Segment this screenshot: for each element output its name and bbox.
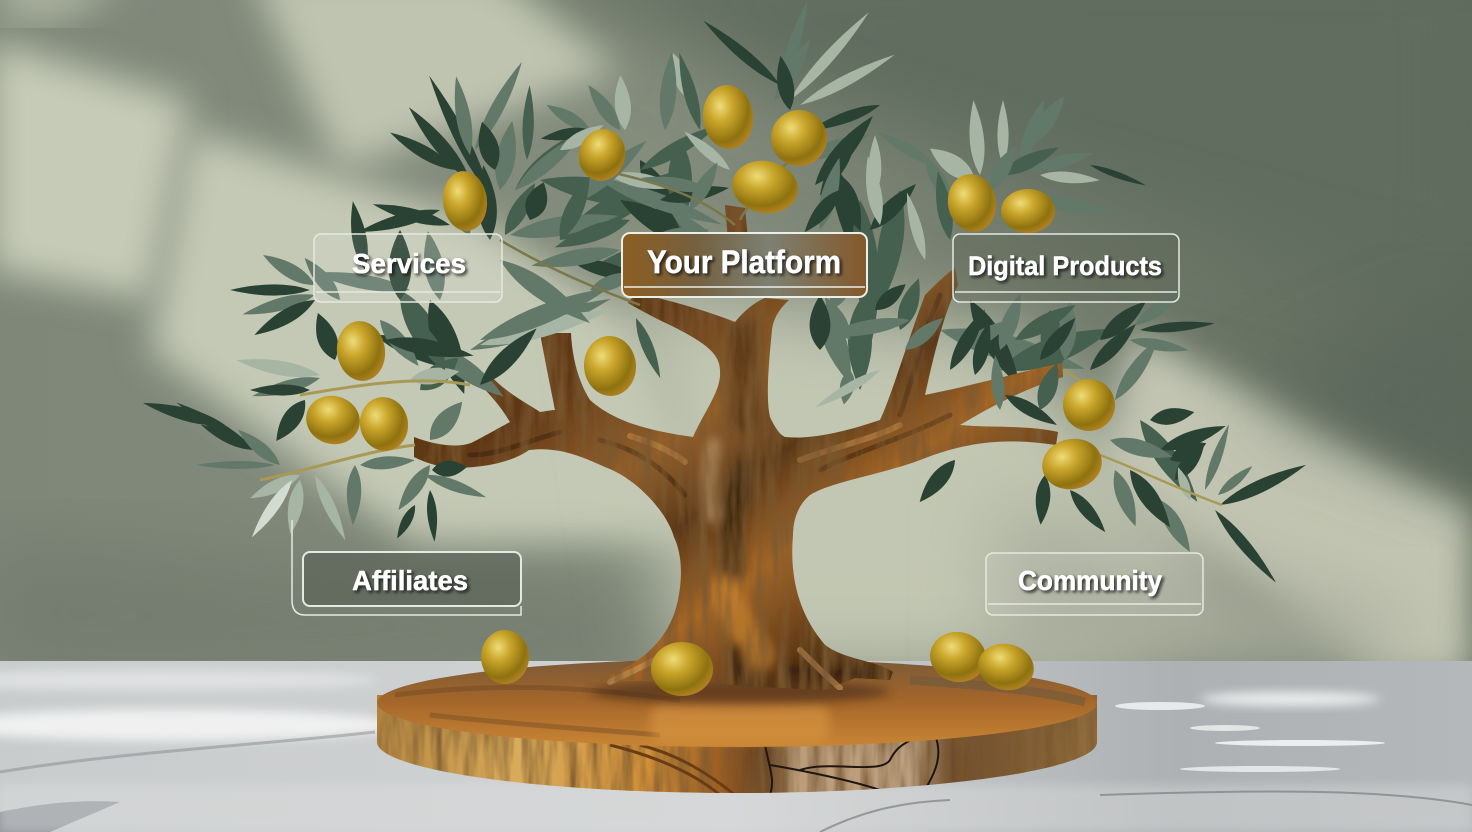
leaves: right middle cluster [810, 263, 1215, 507]
golden olives on the base [481, 628, 1038, 696]
leaves: top center cluster [476, 0, 938, 380]
wooden disc base [377, 659, 1097, 795]
leaves: upper left cluster [346, 59, 573, 271]
label: Digital Products [953, 234, 1179, 302]
label: Your Platform [622, 233, 867, 297]
label: Services [314, 234, 502, 302]
leaf stems [260, 381, 470, 480]
label: Your Platform: Your Platform [647, 244, 841, 280]
leaves: lower left cluster [141, 381, 488, 543]
tree trunk and branches [414, 205, 1063, 690]
olive leaves behind the branches [389, 140, 1206, 508]
label: Services: Services [352, 248, 466, 279]
label: Community [986, 553, 1203, 615]
label: Community: Community [1018, 565, 1162, 596]
leaves: upper right cluster [901, 91, 1147, 261]
olive leaves [141, 0, 1309, 586]
label: Affiliates [292, 520, 521, 615]
label: Affiliates: Affiliates [352, 565, 468, 596]
leaves: lower right cluster [1033, 334, 1309, 586]
golden olives on the tree [301, 83, 1115, 495]
label: Digital Products: Digital Products [968, 251, 1162, 281]
marble table [0, 661, 1472, 832]
leaves: left middle cluster [230, 229, 614, 446]
